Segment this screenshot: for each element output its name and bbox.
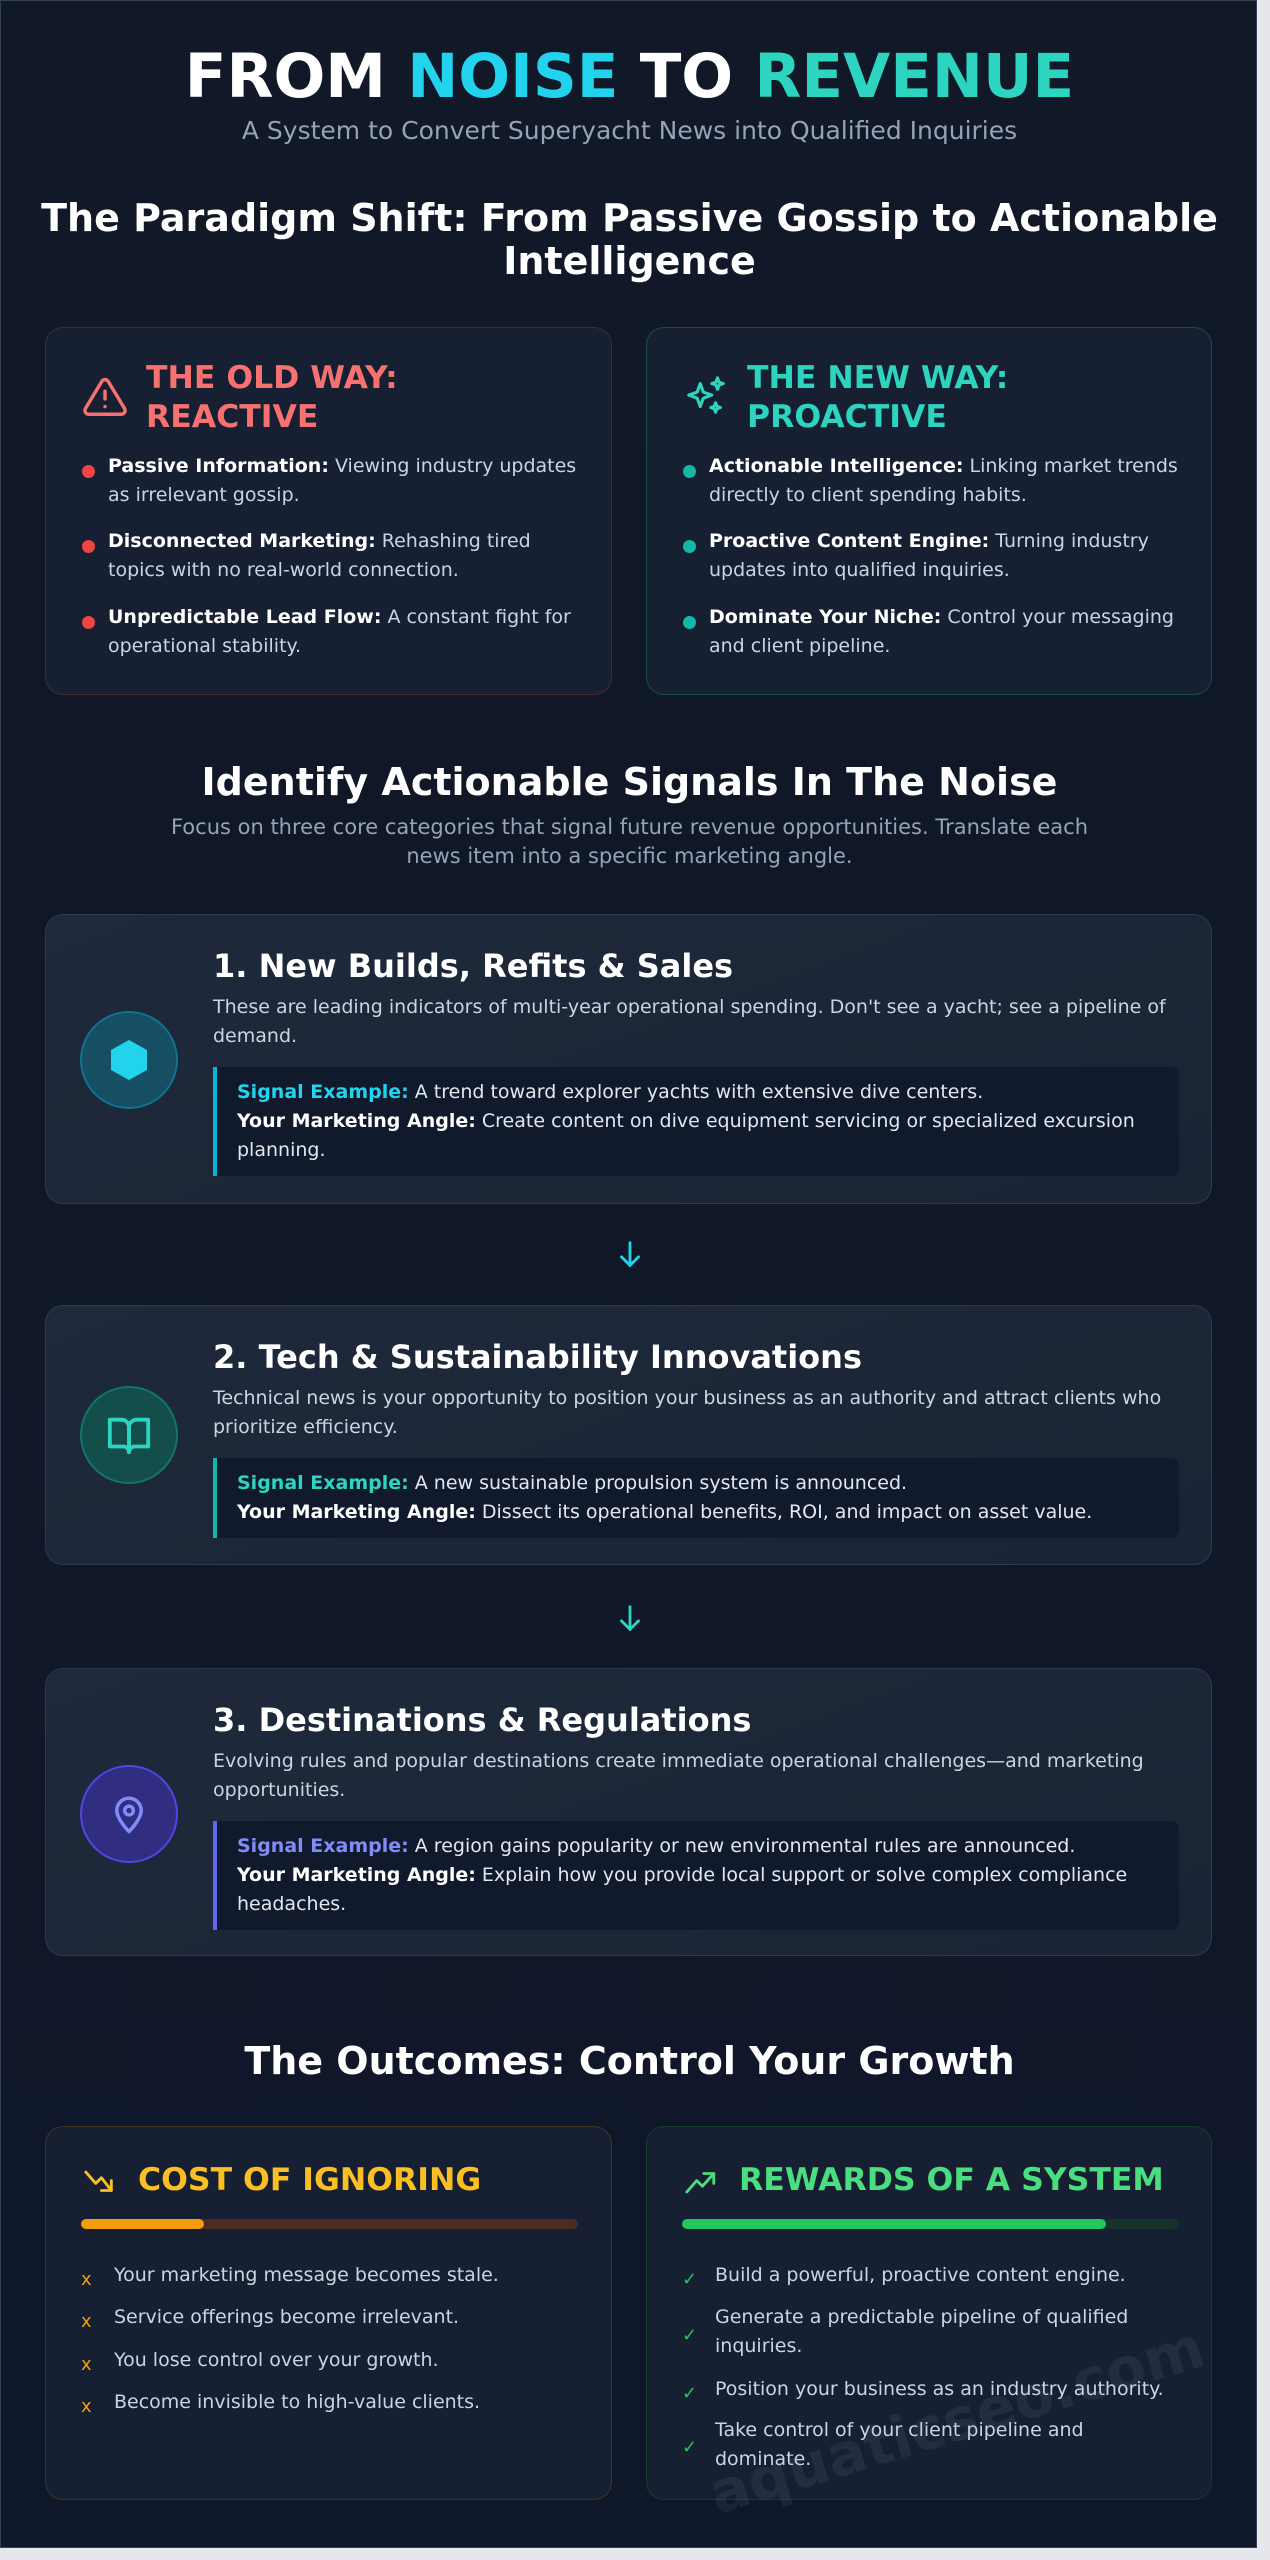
list: cost: Become invisible to high-value clients. <box>114 2391 480 2413</box>
watermark: aquaticseo.com <box>701 2313 1212 2528</box>
bullet list: old way: Disconnected Marketing: Rehashing tired topics with no real-world connection. <box>108 530 531 581</box>
list: rewards: ✓ <box>682 2269 697 2290</box>
list: rewards: Take control of your client pipeline and dominate. <box>715 2419 1084 2470</box>
card title: 1. New Builds, Refits & Sales <box>213 947 733 985</box>
heading: old way <box>146 360 398 435</box>
bullet list: new way <box>683 455 1178 657</box>
icon: trending down <box>84 2170 113 2192</box>
list: rewards: ✓ <box>682 2383 697 2404</box>
bullet list: old way <box>82 455 576 657</box>
signal box: Signal Example: A region gains popularity or new environmental rules are announced. <box>237 1835 1075 1857</box>
card description: Technical news is your opportunity to position your business as an authority and attract clients who prioritize efficiency. <box>213 1387 1161 1438</box>
list: cost: You lose control over your growth. <box>114 2349 439 2371</box>
heading: cost: COST OF IGNORING <box>138 2162 481 2198</box>
card: destinations <box>45 1668 1212 1956</box>
signal box <box>213 1458 1179 1538</box>
signal box: Signal Example: A new sustainable propulsion system is announced. <box>237 1472 907 1494</box>
heading: old way: THE OLD WAY: <box>146 360 398 396</box>
heading: paradigm shift: The Paradigm Shift: From Passive Gossip to Actionable Intelligence <box>41 196 1218 283</box>
title: FROM NOISE TO REVENUE <box>185 41 1074 112</box>
signal box <box>213 1067 1179 1176</box>
panel: old way <box>45 327 612 695</box>
list: cost: Your marketing message becomes stale. <box>114 2264 499 2286</box>
panel: rewards <box>646 2126 1212 2500</box>
icon: warning <box>83 378 127 416</box>
list: cost: x <box>81 2396 92 2417</box>
card description: These are leading indicators of multi-year operational spending. Don't see a yacht; see a pipeline of demand. <box>213 996 1166 1047</box>
card title: 2. Tech & Sustainability Innovations <box>213 1338 862 1376</box>
list: rewards: Build a powerful, proactive content engine. <box>715 2264 1126 2286</box>
bullet list: new way: Proactive Content Engine: Turning industry updates into qualified inquiries. <box>709 530 1149 581</box>
signal box: Your Marketing Angle: Explain how you provide local support or solve complex compliance headaches. <box>237 1864 1127 1915</box>
icon: hexagon <box>80 1011 178 1109</box>
list: cost <box>81 2264 499 2417</box>
signal box: Your Marketing Angle: Create content on dive equipment servicing or specialized excursion planning. <box>237 1110 1135 1161</box>
list: rewards: ✓ <box>682 2325 697 2346</box>
card: tech <box>45 1305 1212 1565</box>
list: cost: x <box>81 2354 92 2375</box>
heading: identify signals: Identify Actionable Signals In The Noise <box>202 760 1057 804</box>
heading: new way: PROACTIVE <box>747 399 947 435</box>
signal box: Signal Example: A trend toward explorer yachts with extensive dive centers. <box>237 1081 983 1103</box>
bullet list: old way: Unpredictable Lead Flow: A constant fight for operational stability. <box>108 606 571 657</box>
card description: Evolving rules and popular destinations create immediate operational challenges—and marketing opportunities. <box>213 1750 1144 1801</box>
card: new builds <box>45 914 1212 1204</box>
list: rewards: ✓ <box>682 2437 697 2458</box>
panel: new way <box>646 327 1212 695</box>
list: rewards: Generate a predictable pipeline of qualified inquiries. <box>715 2306 1128 2357</box>
arrow <box>620 1241 640 1268</box>
card title: 3. Destinations & Regulations <box>213 1701 751 1739</box>
bullet list: new way: Actionable Intelligence: Linking market trends directly to client spending habits. <box>709 455 1178 506</box>
arrow <box>620 1605 640 1632</box>
section intro: Focus on three core categories that signal future revenue opportunities. Translate each news item into a specific marketing angle. <box>171 815 1088 868</box>
list: rewards: Position your business as an industry authority. <box>715 2378 1164 2400</box>
heading: new way: THE NEW WAY: <box>747 360 1008 396</box>
list: cost: x <box>81 2311 92 2332</box>
list: rewards <box>682 2264 1164 2470</box>
icon: book <box>80 1386 178 1484</box>
progress bar: rewards <box>682 2219 1179 2229</box>
icon: sparkles <box>687 376 725 414</box>
bullet list: old way: Passive Information: Viewing industry updates as irrelevant gossip. <box>108 455 576 506</box>
heading: outcomes: The Outcomes: Control Your Growth <box>244 2039 1015 2083</box>
panel: cost of ignoring <box>45 2126 612 2500</box>
icon: trending up <box>685 2172 716 2194</box>
list: cost: Service offerings become irrelevant. <box>114 2306 459 2328</box>
icon: map pin <box>80 1765 178 1863</box>
heading: old way: REACTIVE <box>146 399 318 435</box>
subtitle: A System to Convert Superyacht News into Qualified Inquiries <box>242 116 1017 145</box>
signal box <box>213 1821 1179 1930</box>
heading: new way <box>747 360 1008 435</box>
list: cost: x <box>81 2269 92 2290</box>
bullet list: new way: Dominate Your Niche: Control your messaging and client pipeline. <box>709 606 1174 657</box>
heading: rewards: REWARDS OF A SYSTEM <box>739 2162 1164 2198</box>
signal box: Your Marketing Angle: Dissect its operational benefits, ROI, and impact on asset value. <box>237 1501 1092 1523</box>
progress bar: cost <box>81 2219 578 2229</box>
